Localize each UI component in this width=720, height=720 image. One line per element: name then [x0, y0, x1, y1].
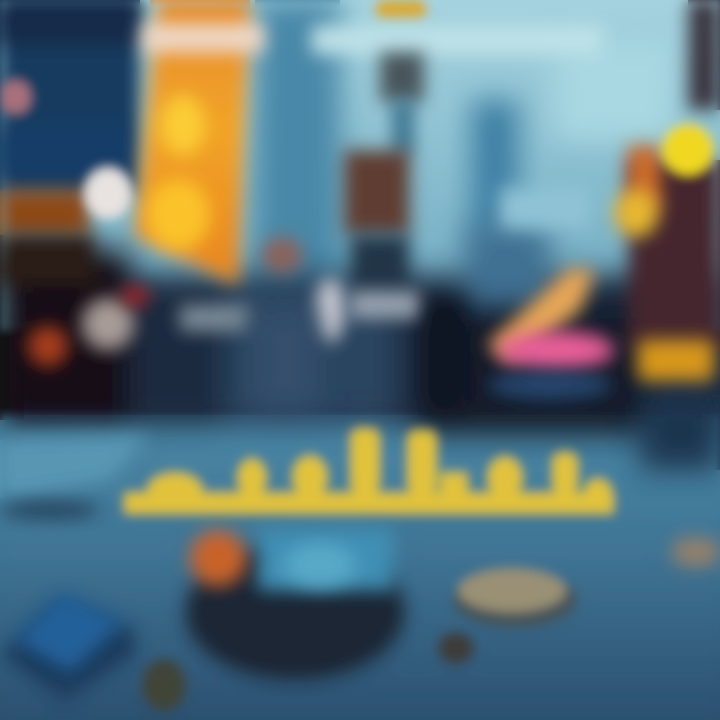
ground [0, 415, 720, 720]
yellow bar chart silhouette [124, 428, 614, 514]
dark street band [0, 250, 720, 435]
dark bowl [185, 528, 405, 680]
coin: centre [453, 568, 577, 628]
orange tower [135, 0, 264, 285]
street lights and figures [28, 278, 465, 410]
blue book [0, 592, 135, 700]
distant skyscrapers [465, 100, 590, 305]
left dark building [0, 0, 140, 285]
ground highlight [0, 435, 150, 498]
white glow [84, 167, 132, 219]
right building and lights [614, 0, 720, 470]
coin: right edge [672, 538, 720, 566]
dark streak [0, 500, 100, 520]
central brown building [262, 150, 410, 295]
central lamp post [375, 0, 427, 155]
pale sign [312, 26, 602, 54]
small pebbles [142, 632, 474, 711]
sky background [0, 0, 720, 330]
neon pink and orange shape [488, 268, 614, 399]
